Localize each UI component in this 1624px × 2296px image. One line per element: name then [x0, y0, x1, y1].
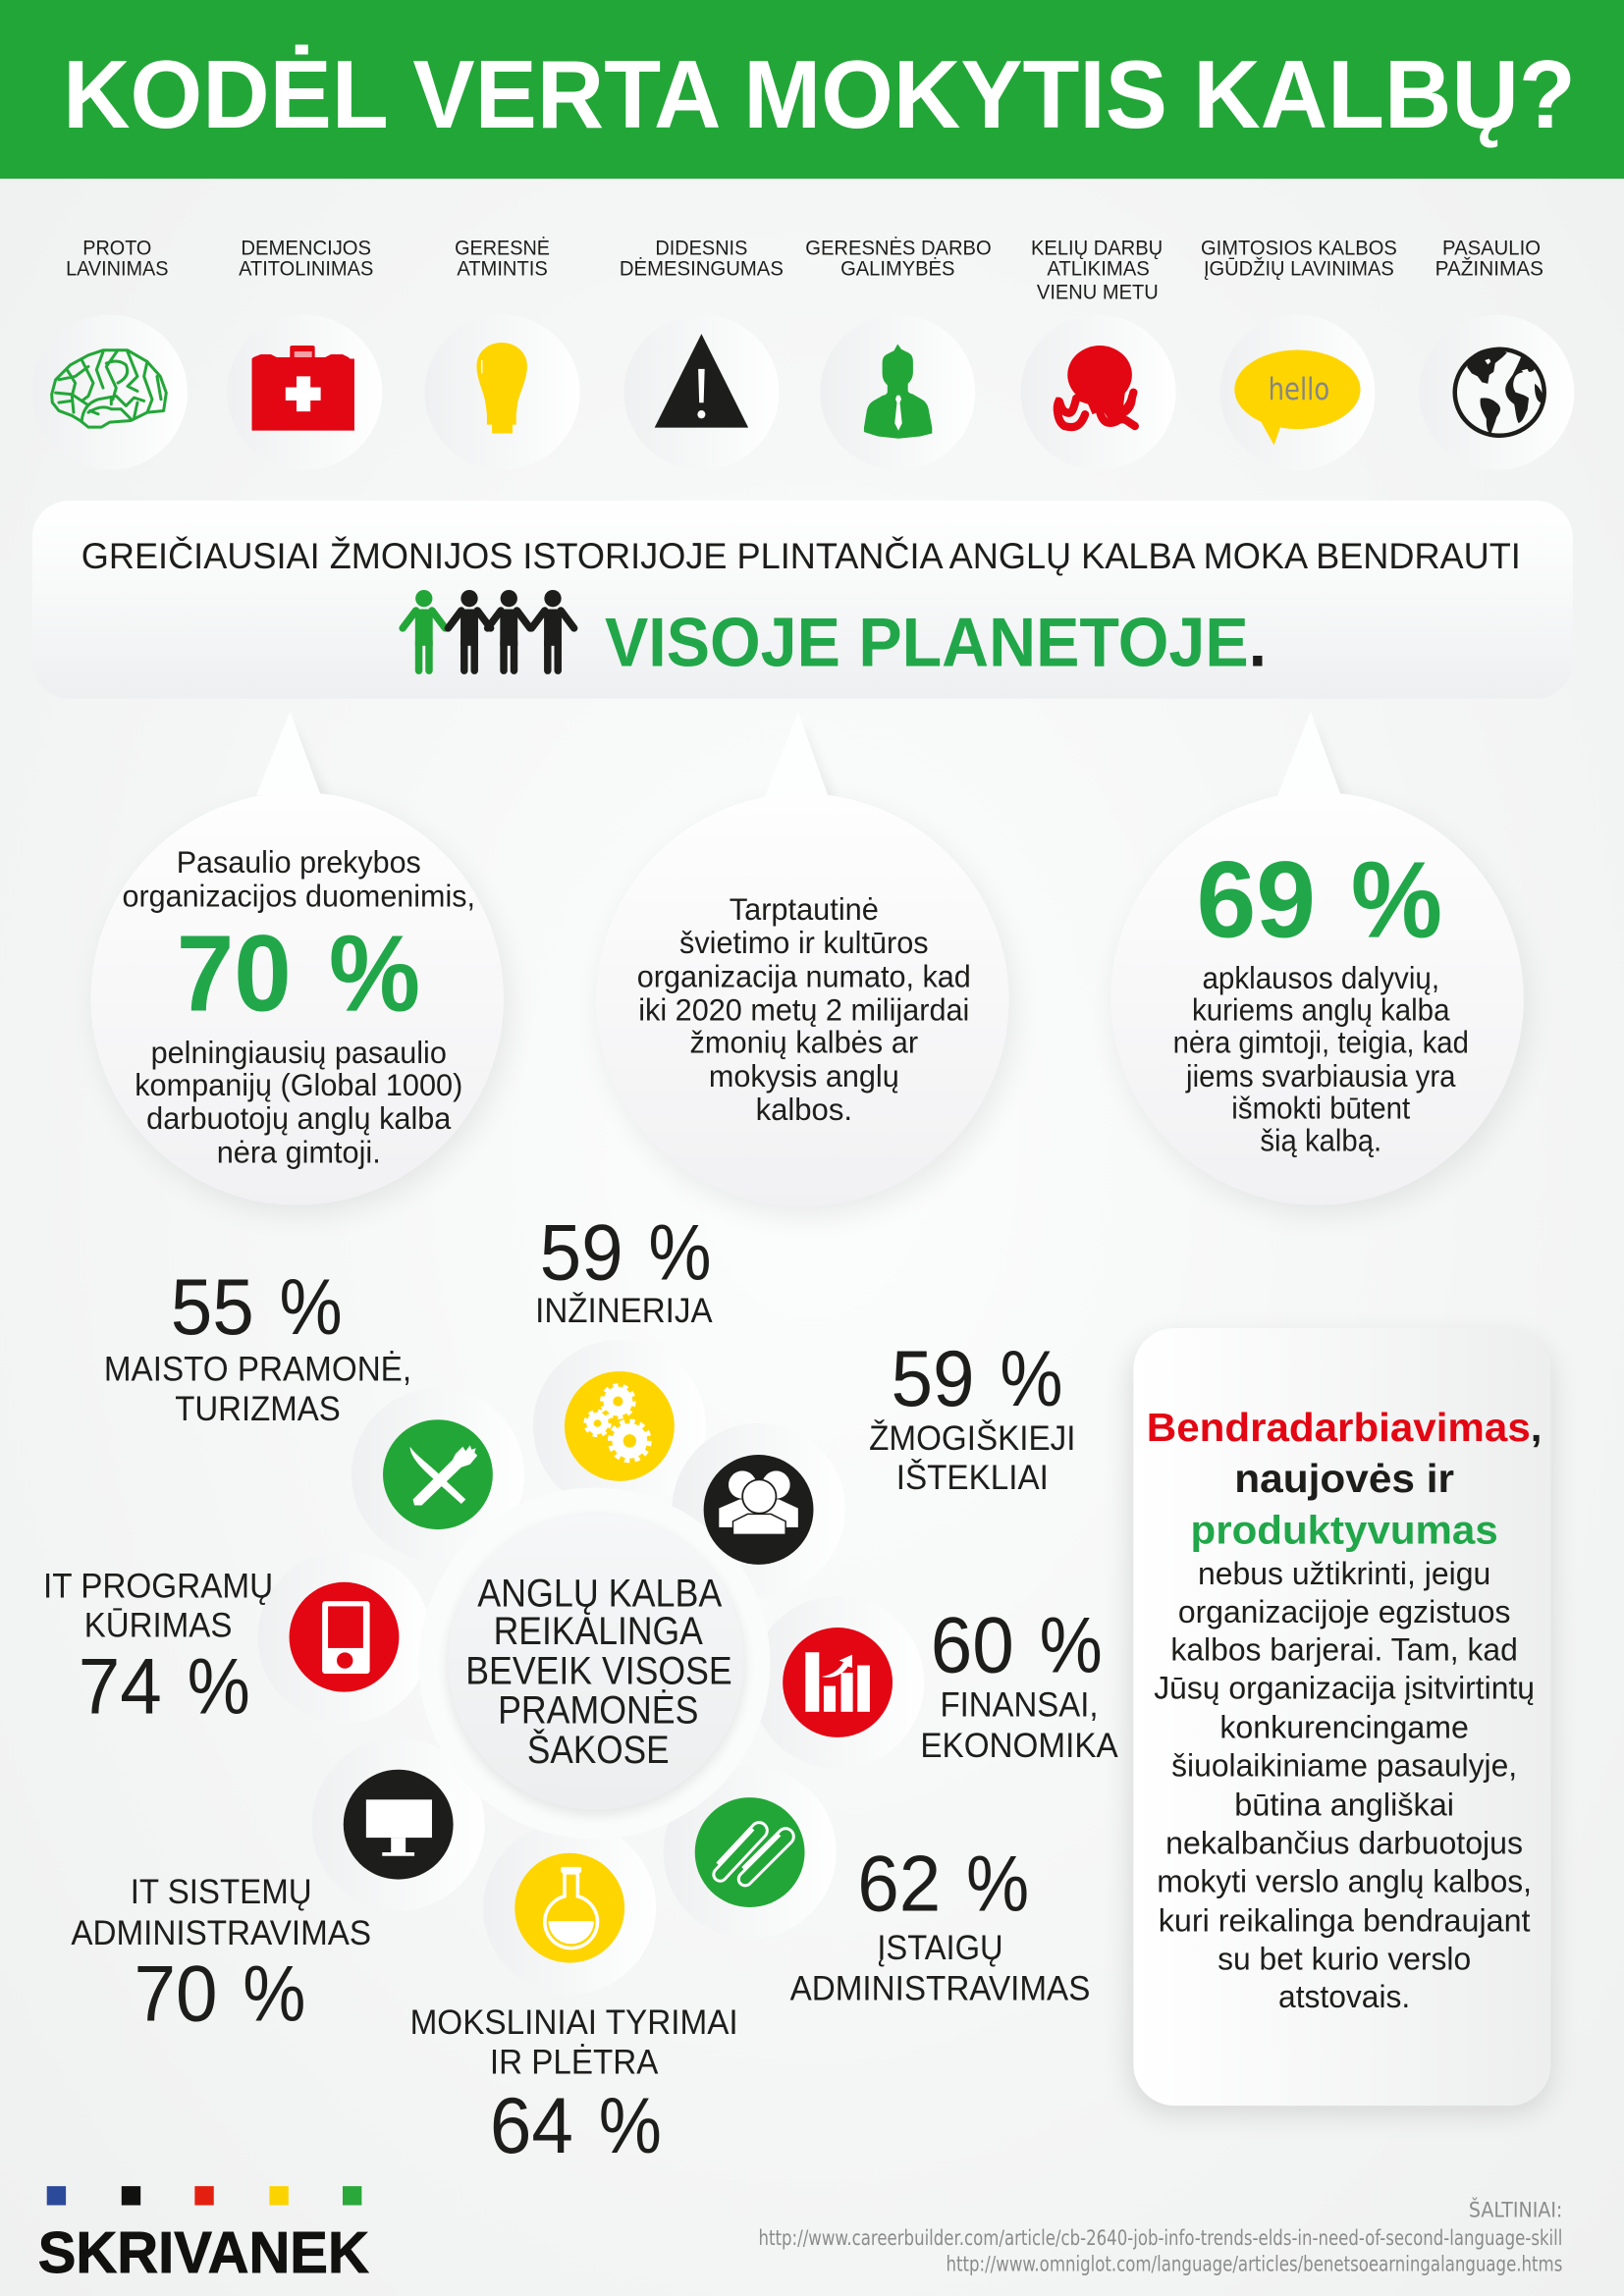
label: gimtosios kalbos įgūdžių lavinimas: GIMTOSIOS KALBOS: [1201, 238, 1397, 260]
banner headline: VISOJE PLANETOJE.: [605, 605, 1267, 681]
panel body text: organizacijoje egzistuos: [1178, 1594, 1510, 1629]
label: proto lavinimas: LAVINIMAS: [66, 257, 169, 280]
statistic 69 %: %: [1351, 840, 1442, 961]
stat: office administration 62 %: ĮSTAIGŲ: [877, 1929, 1003, 1967]
label: geresnės darbo galimybės: [805, 238, 992, 280]
panel heading: produktyvumas: [1191, 1507, 1498, 1552]
label: geresnė atmintis: ATMINTIS: [457, 257, 548, 280]
icon: octopus: [1021, 315, 1176, 470]
stat: IT development 74 %: IT PROGRAMŲ: [43, 1567, 273, 1605]
icon: brain: [32, 315, 188, 470]
stat: research 64 %: MOKSLINIAI TYRIMAI: [410, 2003, 738, 2042]
icon: light bulb: [425, 315, 580, 470]
label: geresnė atmintis: [455, 238, 550, 280]
banner panel: [32, 501, 1573, 699]
icon: people group: [704, 1455, 813, 1565]
callout: UNESCO forecast: [596, 712, 1015, 1217]
central hub: REIKALINGA: [494, 1610, 703, 1653]
callout: world trade organisation 70 %: organizacijos duomenimis,: [123, 879, 475, 913]
callout: UNESCO forecast: žmonių kalbės ar: [689, 1026, 918, 1060]
panel body text: nekalbančius darbuotojus: [1165, 1826, 1523, 1861]
panel body text: kuri reikalinga bendraujant: [1159, 1903, 1531, 1939]
stat: IT systems 70 %: ADMINISTRAVIMAS: [71, 1914, 371, 1952]
panel heading: [1147, 1405, 1542, 1552]
panel body text: su bet kurio verslo: [1218, 1941, 1471, 1976]
icon: hello speech bubble: [1219, 315, 1375, 470]
icon: laboratory flask: [514, 1853, 624, 1963]
label: kelių darbų atlikimas vienu metu: [1031, 238, 1163, 303]
callout: 69 % survey: apklausos dalyvių,: [1202, 961, 1439, 995]
callout: 69 % survey: [1110, 712, 1529, 1215]
panel: collaboration message: [1130, 1328, 1550, 2113]
panel body text: konkurencingame: [1219, 1710, 1469, 1745]
callout: world trade organisation 70 %: pelningiausių pasaulio: [151, 1036, 447, 1070]
stat: research 64 %: [410, 2003, 738, 2170]
label: geresnės darbo galimybės: GERESNĖS DARBO: [805, 238, 992, 260]
callout: 69 % survey: nėra gimtoji, teigia, kad: [1173, 1026, 1469, 1060]
stat: finance 60 %: 60: [931, 1602, 1014, 1690]
header band with title: KODĖL VERTA MOKYTIS KALBŲ?: [63, 40, 1576, 148]
panel body text: atstovais.: [1278, 1979, 1410, 2014]
stat: finance 60 %: FINANSAI,: [941, 1685, 1099, 1724]
panel heading: Bendradarbiavimas ,: [1147, 1405, 1542, 1450]
central hub: PRAMONĖS: [498, 1689, 698, 1733]
panel body text: šiuolaikiniame pasaulyje,: [1171, 1747, 1517, 1783]
label: pasaulio pažinimas: PASAULIO: [1442, 238, 1541, 260]
stat: research 64 %: %: [599, 2082, 662, 2170]
label: geresnės darbo galimybės: GALIMYBĖS: [840, 257, 954, 280]
icon: monitor: [344, 1770, 454, 1880]
central hub: BEVEIK VISOSE: [465, 1649, 732, 1692]
sources: [759, 2197, 1562, 2276]
label: pasaulio pažinimas: PAŽINIMAS: [1435, 257, 1543, 280]
callout: UNESCO forecast: organizacija numato, kad: [637, 959, 971, 993]
stat: IT development 74 %: 74: [79, 1642, 162, 1731]
callout: 69 % survey: kuriems anglų kalba: [1192, 993, 1450, 1028]
stat: research 64 %: 64: [490, 2082, 573, 2170]
stat: human resources 59 %: %: [1000, 1335, 1062, 1423]
icon: hello speech bubble: hello: [1269, 372, 1329, 407]
callout: world trade organisation 70 %: nėra gimtoji.: [217, 1135, 381, 1169]
label: gimtosios kalbos įgūdžių lavinimas: [1201, 238, 1397, 280]
stat: office administration 62 %: 62: [857, 1841, 941, 1929]
callout: world trade organisation 70 %: darbuotojų anglų kalba: [146, 1101, 452, 1136]
stat: engineering 59 %: [535, 1209, 713, 1330]
stat: engineering 59 %: 59: [540, 1209, 623, 1298]
callout: world trade organisation 70 %: [90, 712, 510, 1215]
label: didesnis dėmesingumas: DĖMESINGUMAS: [620, 257, 784, 280]
panel body text: [1154, 1556, 1535, 2014]
stat: engineering 59 %: %: [648, 1209, 712, 1298]
icon: gears: [565, 1371, 675, 1481]
label: gimtosios kalbos įgūdžių lavinimas: ĮGŪDŽIŲ LAVINIMAS: [1204, 257, 1394, 280]
label: demencijos atitolinimas: DEMENCIJOS: [241, 238, 371, 260]
stat: office administration 62 %: ADMINISTRAVIMAS: [790, 1970, 1090, 2008]
label: demencijos atitolinimas: [239, 238, 373, 280]
stat: human resources 59 %: 59: [892, 1335, 975, 1423]
stat: food industry 55 %: %: [280, 1263, 343, 1352]
central hub: [419, 1488, 770, 1840]
stat: IT development 74 %: [43, 1567, 273, 1731]
stat: finance 60 %: EKONOMIKA: [920, 1727, 1118, 1765]
satellite halos behind hub: [257, 1340, 924, 1995]
panel body text: mokyti verslo anglų kalbos,: [1157, 1863, 1532, 1898]
stat: food industry 55 %: MAISTO PRAMONĖ,: [104, 1351, 411, 1389]
stat: office administration 62 %: %: [966, 1841, 1029, 1929]
stat: human resources 59 %: [869, 1335, 1075, 1497]
icon: bar chart: [783, 1628, 893, 1737]
logo: Skrivanek: SKRIVANEK: [38, 2219, 369, 2285]
stat: finance 60 %: %: [1040, 1602, 1103, 1690]
stat: food industry 55 %: 55: [171, 1263, 254, 1352]
icon: businessman: [820, 315, 975, 470]
label: kelių darbų atlikimas vienu metu: ATLIKIMAS: [1047, 257, 1150, 280]
icon: globe: [1419, 315, 1574, 470]
callout: 69 % survey: išmokti būtent: [1231, 1092, 1411, 1126]
label: kelių darbų atlikimas vienu metu: VIENU METU: [1037, 281, 1159, 303]
stat: IT systems 70 %: 70: [134, 1950, 217, 2039]
stat: food industry 55 %: TURIZMAS: [175, 1390, 341, 1428]
stat: human resources 59 %: IŠTEKLIAI: [896, 1459, 1049, 1497]
stat: food industry 55 %: [104, 1263, 411, 1428]
statistic 70 %: 70: [177, 913, 292, 1034]
header band with title: [0, 0, 1624, 179]
stat: IT development 74 %: KŪRIMAS: [84, 1607, 232, 1645]
callout: world trade organisation 70 %: Pasaulio prekybos: [177, 845, 421, 880]
icon: paper clips: [695, 1797, 805, 1907]
panel body text: kalbos barjerai. Tam, kad: [1170, 1632, 1518, 1668]
panel body text: nebus užtikrinti, jeigu: [1198, 1556, 1490, 1591]
stat: IT systems 70 %: [71, 1873, 371, 2039]
stat: IT systems 70 %: IT SISTEMŲ: [131, 1873, 312, 1911]
icon: first aid kit: [227, 315, 382, 470]
callout: UNESCO forecast: kalbos.: [756, 1093, 852, 1127]
panel body text: būtina angliškai: [1234, 1788, 1454, 1823]
panel body text: Jūsų organizacija įsitvirtintų: [1154, 1670, 1535, 1705]
central hub: ANGLŲ KALBA: [477, 1572, 723, 1615]
stat: engineering 59 %: INŽINERIJA: [535, 1292, 713, 1330]
stat: IT development 74 %: %: [188, 1642, 250, 1731]
logo: Skrivanek: [38, 2186, 369, 2285]
callout: UNESCO forecast: švietimo ir kultūros: [679, 926, 929, 960]
label: proto lavinimas: [66, 238, 169, 280]
statistic 70 %: %: [329, 913, 420, 1034]
callout: UNESCO forecast: iki 2020 metų 2 milijardai: [638, 993, 969, 1028]
callout: world trade organisation 70 %: kompanijų (Global 1000): [135, 1068, 462, 1102]
stat: research 64 %: IR PLĖTRA: [490, 2043, 659, 2081]
stat: human resources 59 %: ŽMOGIŠKIEJI: [869, 1419, 1075, 1458]
icon: fork and knife: [383, 1419, 493, 1529]
banner sentence: GREIČIAUSIAI ŽMONIJOS ISTORIJOJE PLINTANČIA ANGLŲ KALBA MOKA BENDRAUTI: [81, 535, 1521, 576]
sources: ŠALTINIAI:: [1469, 2197, 1562, 2221]
benefit labels row: [66, 238, 1543, 303]
icon: people holding hands: [403, 590, 574, 670]
stat: office administration 62 %: [790, 1841, 1090, 2008]
label: geresnė atmintis: GERESNĖ: [455, 238, 550, 260]
callout: 69 % survey: jiems svarbiausia yra: [1185, 1059, 1456, 1094]
callout: UNESCO forecast: Tarptautinė: [730, 892, 879, 927]
callout: UNESCO forecast: mokysis anglų: [709, 1059, 899, 1094]
label: proto lavinimas: PROTO: [82, 238, 151, 260]
label: didesnis dėmesingumas: DIDESNIS: [655, 238, 747, 260]
callout: 69 % survey: šią kalbą.: [1260, 1123, 1381, 1157]
stat: IT systems 70 %: %: [243, 1950, 305, 2039]
label: pasaulio pažinimas: [1435, 238, 1543, 280]
stat: finance 60 %: [920, 1602, 1118, 1765]
central hub: ŠAKOSE: [527, 1729, 670, 1772]
icon: warning triangle: [623, 315, 779, 470]
label: demencijos atitolinimas: ATITOLINIMAS: [239, 257, 373, 280]
panel heading: naujovės ir: [1234, 1456, 1454, 1501]
icon: mobile device: [290, 1582, 399, 1692]
label: kelių darbų atlikimas vienu metu: KELIŲ DARBŲ: [1031, 238, 1163, 260]
statistic 69 %: 69: [1197, 840, 1316, 961]
label: didesnis dėmesingumas: [620, 238, 784, 280]
